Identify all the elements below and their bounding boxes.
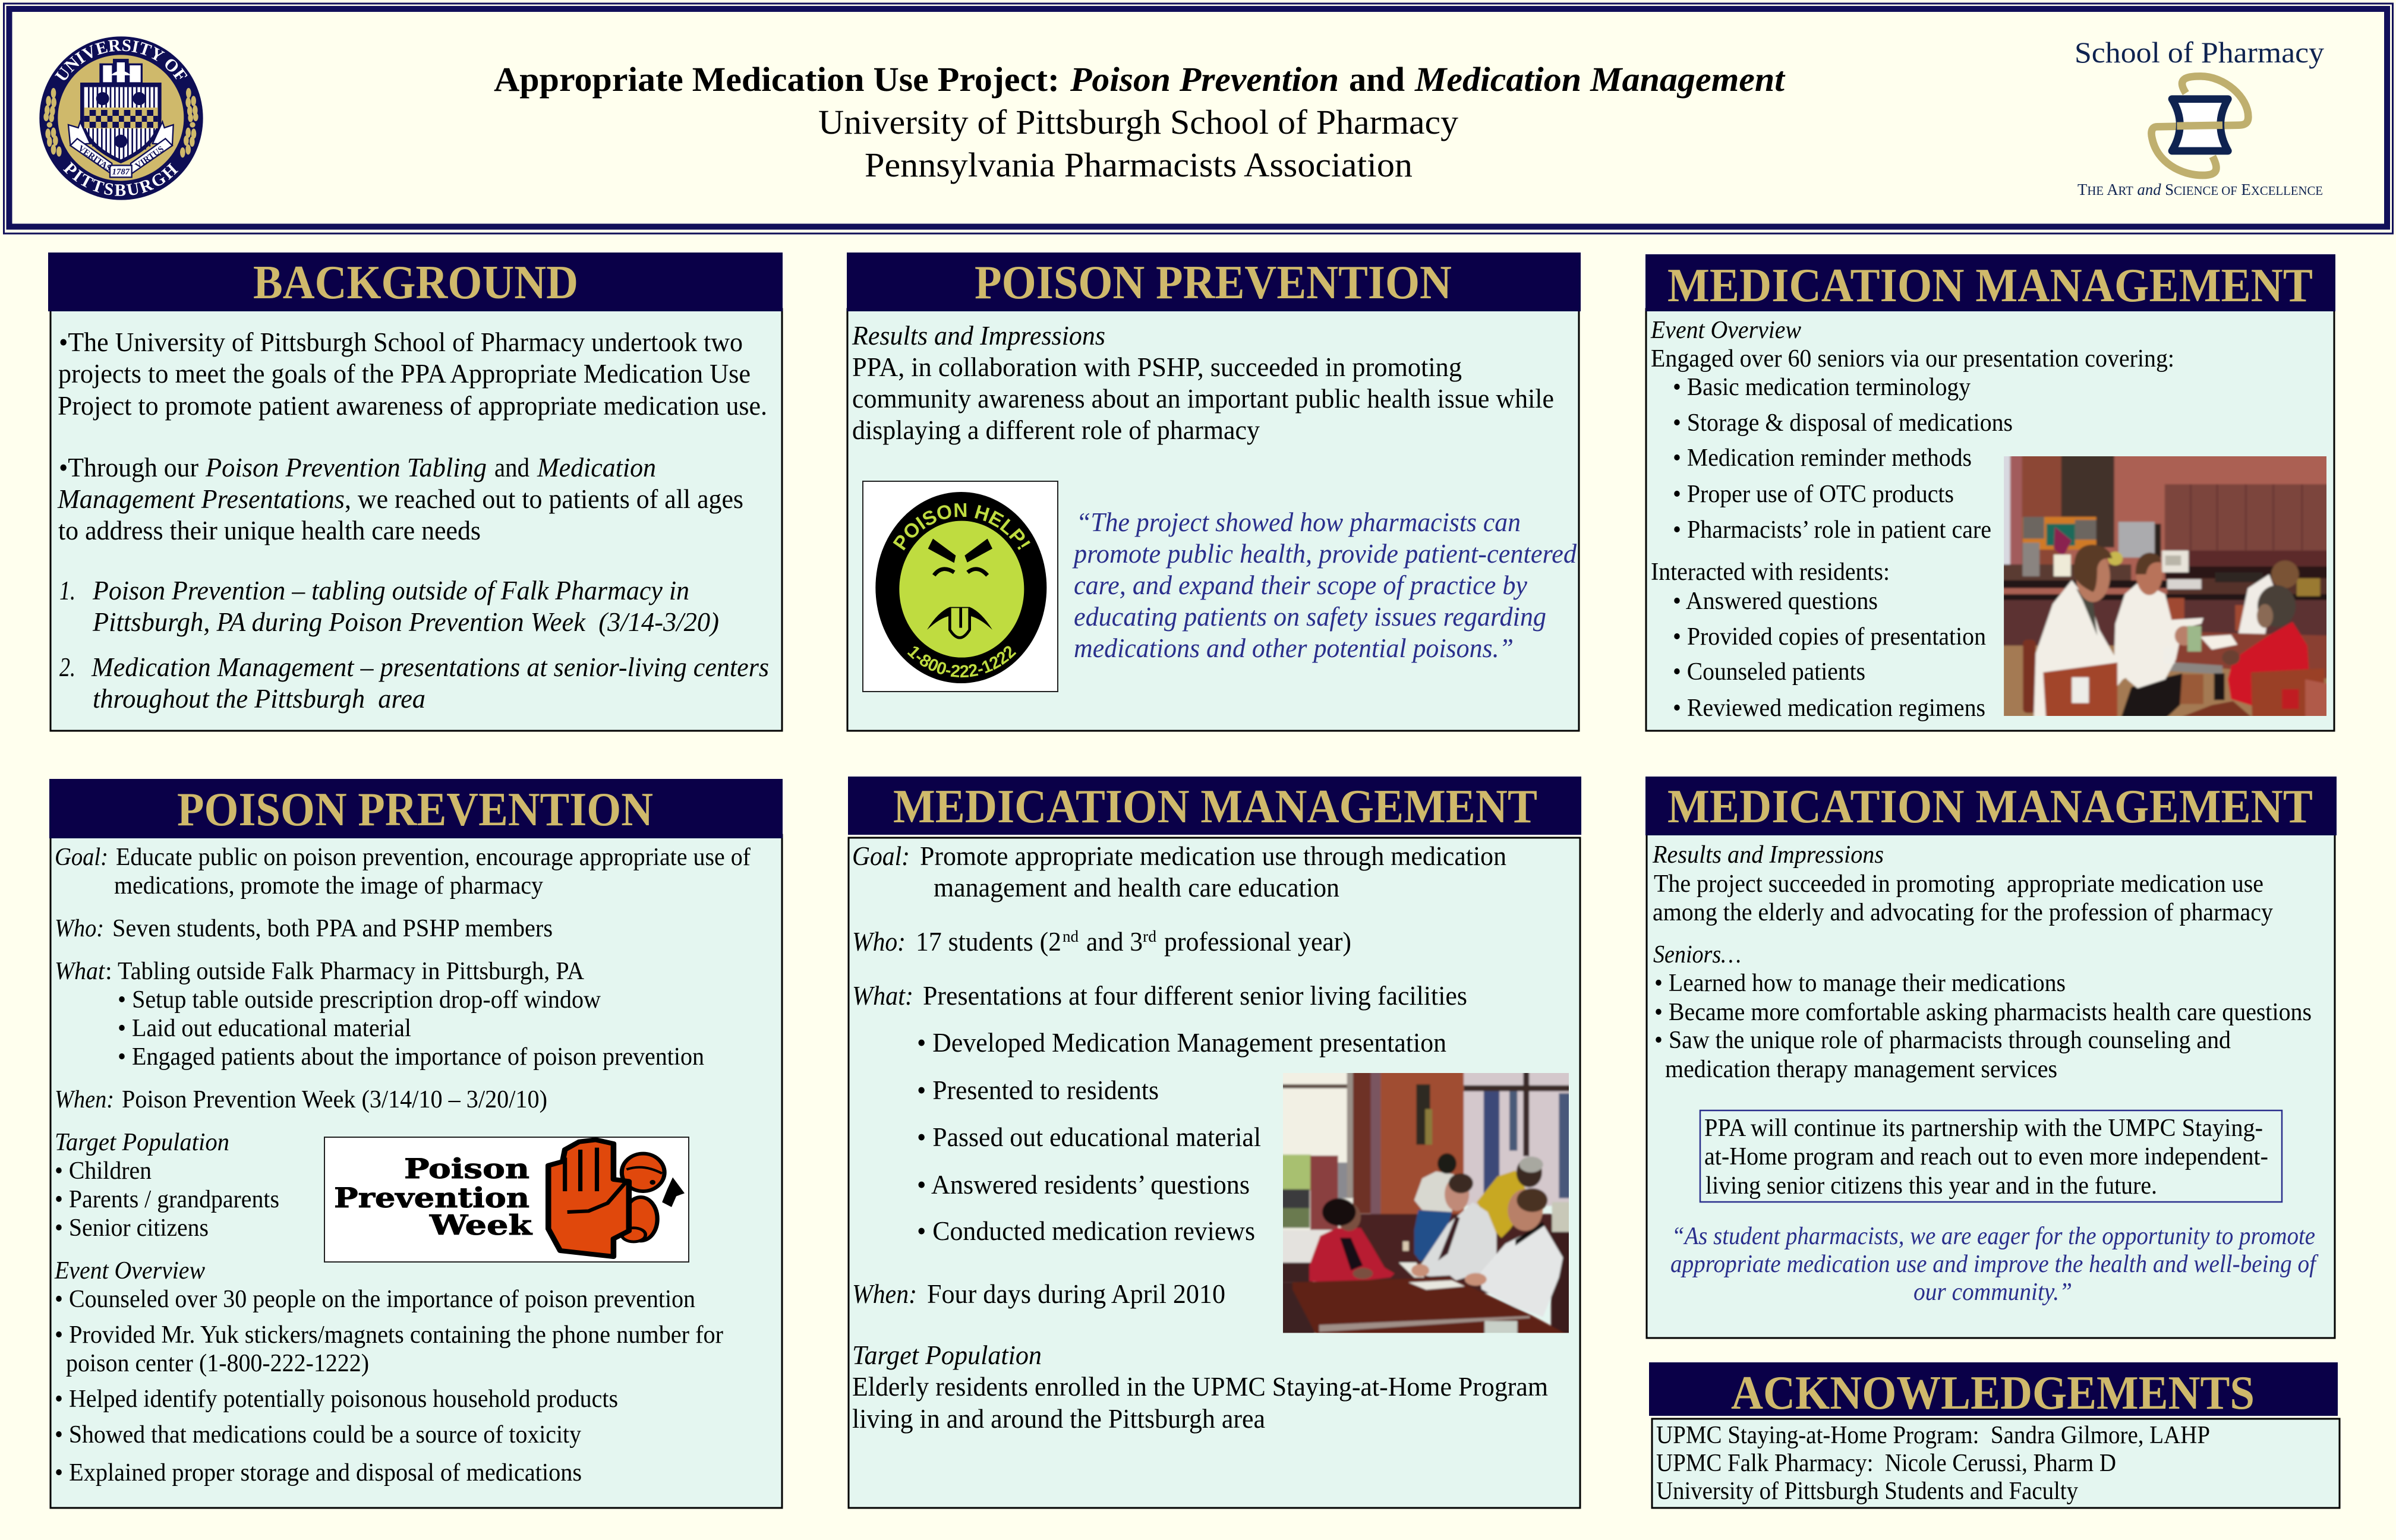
icon: University of Pittsburgh seal: PITTSBURGH — [63, 162, 178, 196]
icon: School of Pharmacy logo — [2075, 36, 2324, 198]
icon: University of Pittsburgh seal — [39, 36, 203, 200]
text block: target population: Elderly residents enrolled in the UPMC Staying-at-Home Program — [852, 1371, 1548, 1402]
icon: University of Pittsburgh seal: 1787 — [112, 168, 130, 177]
text block: background intro — [58, 327, 767, 421]
text block: event overview: Interacted with residents: — [1651, 558, 1890, 586]
text block: what: • Laid out educational material — [118, 1015, 411, 1042]
text block: when: Poison Prevention Week (3/14/10 – 3/20/10) — [122, 1086, 547, 1113]
callout: student quote: care, and expand their scope of practice by — [1074, 570, 1528, 600]
text block: outreach: , we reached out to patients of all ages — [345, 484, 743, 514]
text block: who: Seven students, both PPA and PSHP members — [112, 915, 553, 942]
text block: event overview — [1650, 317, 2174, 722]
callout: partnership box: at-Home program and reach out to even more independent- — [1704, 1143, 2268, 1170]
text block: seniors outcomes: • Saw the unique role of pharmacists through counseling and — [1654, 1027, 2231, 1054]
text block: results and impressions — [852, 320, 1554, 445]
text block: background intro: projects to meet the goals of the PPA Appropriate Medication Use — [58, 358, 751, 389]
subtitle: university: University of Pittsburgh School of Pharmacy — [818, 103, 1458, 141]
icon: School of Pharmacy logo: School of Pharmacy — [2075, 36, 2324, 69]
text block: results and impressions: among the elderly and advocating for the profession of pharmacy — [1653, 899, 2273, 926]
icon: Poison Prevention Week logo: Week — [429, 1209, 532, 1241]
text block: results and impressions: community awareness about an important public health issue while — [852, 383, 1554, 414]
text block: event overview: Event Overview — [1650, 317, 1801, 344]
text block: outreach: Management Presentations — [57, 484, 345, 514]
text block: project list — [59, 575, 769, 714]
panel: medication management details — [848, 777, 1581, 1508]
text block: target population: Target Population — [55, 1129, 229, 1156]
text block: outreach: to address their unique health care needs — [58, 515, 481, 545]
icon: University of Pittsburgh seal: UNIVERSITY OF — [55, 39, 188, 80]
text block: event overview: • Answered questions — [1673, 588, 1878, 615]
icon: University of Pittsburgh seal: VIRTUS — [134, 144, 166, 171]
callout: student quote — [1670, 1223, 2319, 1306]
text block: goal: management and health care education — [934, 872, 1339, 902]
text block: target population: • Parents / grandparents — [55, 1186, 279, 1213]
photo: students with resident at table — [2004, 456, 2326, 716]
text block: what: What — [55, 958, 105, 985]
heading: background: BACKGROUND — [253, 257, 578, 309]
text block: project list: Poison Prevention – tabling outside of Falk Pharmacy in — [92, 575, 689, 605]
header banner — [3, 2, 2394, 234]
panel: poison prevention details — [49, 779, 783, 1508]
text block: what: Tabling outside Falk Pharmacy in Pittsburgh, PA — [118, 958, 585, 985]
text block: what: • Presented to residents — [917, 1075, 1159, 1105]
icon: Poison Prevention Week logo: Prevention — [334, 1182, 529, 1214]
heading: poison prevention — [49, 779, 783, 838]
text block: what: Presentations at four different senior living facilities — [923, 980, 1467, 1011]
text block: event overview: • Basic medication terminology — [1673, 374, 1971, 401]
heading: acknowledgements: ACKNOWLEDGEMENTS — [1731, 1367, 2255, 1419]
callout: student quote: appropriate medication use and improve the health and well-being of — [1670, 1251, 2319, 1278]
text block: acknowledgement names: UPMC Falk Pharmacy: Nicole Cerussi, Pharm D — [1656, 1450, 2116, 1477]
text block: what: : — [105, 958, 112, 985]
icon: Poison Prevention Week logo — [324, 1137, 689, 1262]
text block: outreach: and — [494, 452, 529, 482]
panel: background — [48, 253, 783, 731]
text block: goal: Goal: — [852, 841, 910, 871]
text block: goal: Promote appropriate medication use through medication — [920, 841, 1506, 871]
title: and — [1349, 60, 1405, 99]
text block: when: Four days during April 2010 — [927, 1279, 1225, 1309]
text block: seniors outcomes: • Became more comfortable asking pharmacists health care questions — [1654, 999, 2312, 1026]
heading: medication management: MEDICATION MANAGEMENT — [1667, 260, 2313, 312]
text block: event overview: • Explained proper storage and disposal of medications — [55, 1459, 582, 1487]
callout: student quote — [1072, 507, 1577, 663]
text block: outreach: Poison Prevention Tabling — [205, 452, 487, 482]
text block: event overview: • Helped identify potentially poisonous household products — [55, 1386, 618, 1413]
text block: goal: Educate public on poison prevention, encourage appropriate use of — [116, 844, 751, 871]
panel: medication management results — [1645, 777, 2337, 1338]
text block: seniors outcomes: • Learned how to manage their medications — [1654, 970, 2066, 997]
text block: what: • Passed out educational material — [917, 1122, 1261, 1152]
text block: outreach: •Through our — [59, 452, 198, 482]
text block: who — [852, 926, 1351, 957]
icon: Poison Prevention Week logo: Poison — [404, 1153, 529, 1185]
heading: poison prevention: POISON PREVENTION — [177, 784, 653, 836]
text block: results and impressions: Results and Impressions — [852, 320, 1105, 351]
callout: partnership box: PPA will continue its partnership with the UMPC Staying- — [1704, 1115, 2263, 1142]
photo: students with resident at table — [1283, 1073, 1569, 1333]
heading: medication management: MEDICATION MANAGEMENT — [1667, 781, 2313, 833]
panel: acknowledgements — [1649, 1362, 2340, 1508]
heading: poison prevention — [847, 253, 1581, 311]
text block: event overview: • Medication reminder methods — [1673, 444, 1972, 472]
text block: results and impressions: PPA, in collaboration with PSHP, succeeded in promoting — [852, 352, 1462, 382]
subtitle: association: Pennsylvania Pharmacists Association — [865, 146, 1413, 184]
text block: event overview: poison center (1-800-222-1222) — [66, 1350, 369, 1377]
text block: when: When: — [852, 1279, 917, 1309]
text block: who: professional year) — [1164, 926, 1351, 957]
text block: event overview: • Storage & disposal of medications — [1673, 409, 2013, 437]
text block: event overview: • Counseled patients — [1673, 658, 1865, 686]
icon: Mr. Yuk poison help sticker: POISON HELP! — [893, 503, 1030, 550]
text block: event overview: • Counseled over 30 people on the importance of poison prevention — [55, 1286, 695, 1313]
text block: event overview: • Provided copies of presentation — [1673, 623, 1986, 651]
text block: who: nd — [1063, 927, 1079, 945]
text block: target population: • Senior citizens — [55, 1214, 209, 1242]
text block: seniors outcomes: medication therapy management services — [1665, 1056, 2057, 1083]
text block: who: 17 students (2 — [916, 926, 1061, 957]
text block: event overview — [54, 1257, 723, 1487]
text block: acknowledgement names: University of Pittsburgh Students and Faculty — [1656, 1478, 2078, 1505]
text block: results and impressions: Results and Impressions — [1652, 841, 1884, 869]
text block: what: • Conducted medication reviews — [917, 1216, 1255, 1246]
text block: event overview: Event Overview — [54, 1257, 205, 1285]
text block: event overview: • Pharmacists’ role in patient care — [1673, 516, 1991, 544]
callout: partnership box — [1700, 1110, 2282, 1202]
text block: goal: Goal: — [55, 844, 108, 871]
title: Poison Prevention — [1070, 60, 1339, 99]
text block: project list: 2. — [59, 652, 75, 682]
text block: target population: Target Population — [852, 1340, 1042, 1370]
panel: medication management event overview — [1645, 254, 2335, 731]
icon: School of Pharmacy logo: THE ART and SCIENCE OF EXCELLENCE — [2077, 181, 2323, 198]
text block: results and impressions — [1652, 841, 2273, 926]
title: Appropriate Medication Use Project: — [494, 60, 1060, 99]
text block: goal: medications, promote the image of pharmacy — [114, 872, 543, 900]
text block: what — [55, 958, 704, 1071]
text block: project list: Medication Management – presentations at senior-living centers — [91, 652, 769, 682]
icon: University of Pittsburgh seal: VERITAS — [76, 144, 113, 173]
text block: background intro: •The University of Pittsburgh School of Pharmacy undertook two — [59, 327, 743, 357]
text block: results and impressions: displaying a different role of pharmacy — [852, 415, 1260, 445]
heading: poison prevention: POISON PREVENTION — [975, 257, 1452, 309]
text block: event overview: Engaged over 60 seniors via our presentation covering: — [1651, 345, 2174, 373]
title: Medication Management — [1414, 60, 1786, 99]
text block: who: Who: — [852, 926, 906, 957]
title — [494, 60, 1786, 99]
callout: student quote: “As student pharmacists, we are eager for the opportunity to promote — [1672, 1223, 2315, 1250]
text block: event overview: • Showed that medications could be a source of toxicity — [55, 1421, 581, 1449]
callout: student quote: “The project showed how pharmacists can — [1076, 507, 1521, 537]
text block: event overview: • Reviewed medication regimens — [1673, 695, 1985, 722]
text block: acknowledgement names — [1656, 1422, 2210, 1505]
text block: event overview: • Provided Mr. Yuk stickers/magnets containing the phone number for — [55, 1321, 723, 1349]
text block: outreach — [57, 452, 743, 545]
text block: background intro: Project to promote patient awareness of appropriate medication use. — [58, 390, 767, 421]
text block: what — [852, 980, 1467, 1246]
callout: student quote: promote public health, provide patient-centered — [1072, 538, 1577, 569]
text block: project list: 1. — [59, 575, 75, 605]
text block: what: • Setup table outside prescription drop-off window — [118, 986, 601, 1014]
panel: poison prevention results — [846, 253, 1581, 732]
icon: Mr. Yuk poison help sticker: 1-800-222-1222 — [907, 646, 1016, 677]
text block: goal — [55, 844, 751, 900]
text block: who: Who: — [55, 915, 104, 942]
text block: project list: throughout the Pittsburgh area — [93, 683, 425, 714]
text block: seniors outcomes — [1653, 941, 2312, 1083]
text block: outreach: Medication — [537, 452, 656, 482]
text block: what: • Answered residents’ questions — [917, 1169, 1250, 1200]
text block: what: • Engaged patients about the importance of poison prevention — [118, 1043, 704, 1071]
text block: target population: living in and around the Pittsburgh area — [852, 1403, 1265, 1434]
text block: who: and 3 — [1086, 926, 1143, 957]
text block: event overview: • Proper use of OTC products — [1673, 481, 1954, 508]
text block: project list: Pittsburgh, PA during Poison Prevention Week (3/14-3/20) — [92, 607, 719, 637]
heading: background — [48, 253, 783, 311]
text block: target population: • Children — [55, 1157, 152, 1185]
text block: who: rd — [1143, 927, 1157, 945]
icon: Mr. Yuk poison help sticker — [862, 481, 1058, 692]
text block: what: • Developed Medication Management presentation — [917, 1027, 1446, 1058]
text block: what: What: — [852, 980, 913, 1011]
text block: results and impressions: The project succeeded in promoting appropriate medication use — [1654, 870, 2263, 898]
text block: seniors outcomes: Seniors… — [1653, 941, 1741, 968]
text block: when: When: — [55, 1086, 114, 1113]
heading: medication management: MEDICATION MANAGEMENT — [893, 781, 1537, 833]
callout: student quote: medications and other potential poisons.” — [1074, 633, 1514, 663]
callout: student quote: our community.” — [1913, 1279, 2072, 1306]
text block: target population — [852, 1340, 1548, 1434]
callout: partnership box: living senior citizens this year and in the future. — [1705, 1172, 2157, 1200]
callout: student quote: educating patients on safety issues regarding — [1074, 601, 1546, 632]
text block: target population — [55, 1129, 279, 1242]
text block: goal — [852, 841, 1506, 902]
text block: acknowledgement names: UPMC Staying-at-Home Program: Sandra Gilmore, LAHP — [1656, 1422, 2210, 1449]
